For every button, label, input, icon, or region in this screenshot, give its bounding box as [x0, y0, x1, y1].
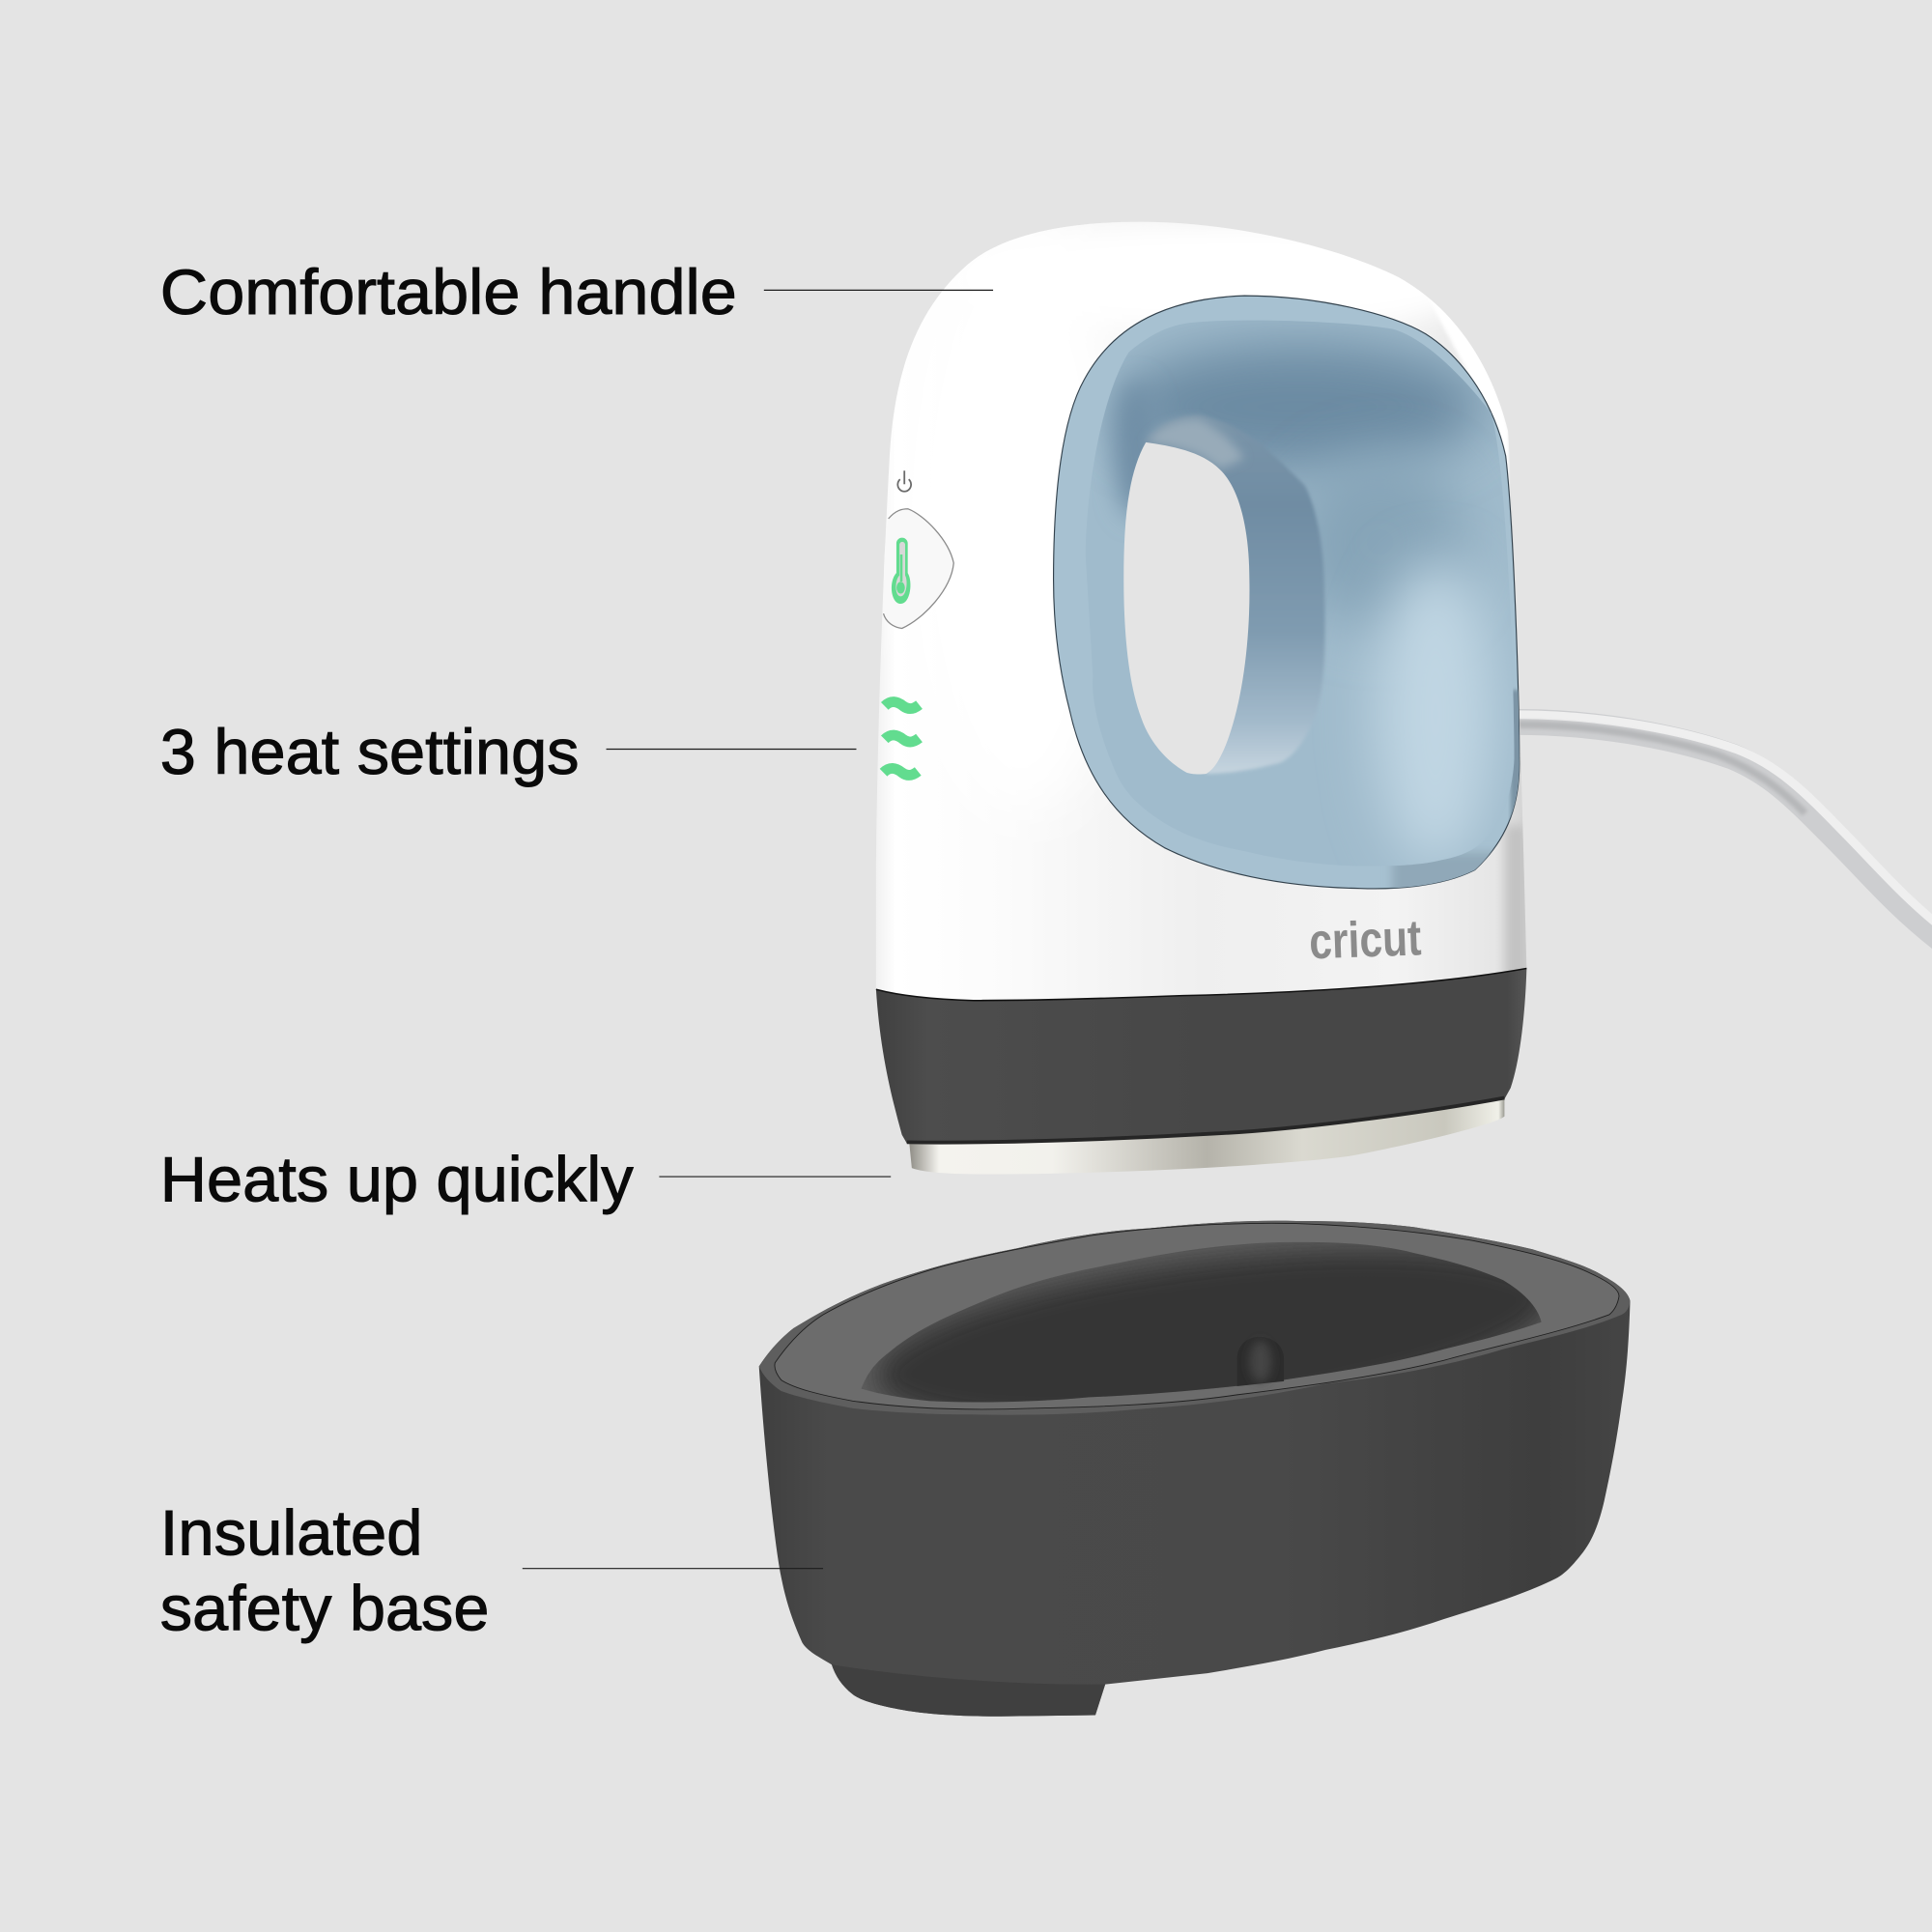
power cord	[1518, 715, 1932, 939]
base outer wall	[759, 1221, 1631, 1717]
dark lower band	[876, 969, 1526, 1144]
heading: insulated safety base: Insulated	[160, 1498, 422, 1570]
heading: heats up quickly: Heats up quickly	[160, 1145, 634, 1216]
base inner well	[850, 1220, 1559, 1454]
seam line	[876, 969, 1526, 1001]
handle recess	[1092, 321, 1515, 866]
handle rim right shade	[1392, 690, 1528, 902]
temperature button	[884, 509, 953, 629]
leader line: insulated safety base	[523, 1568, 823, 1570]
leader line: heats up quickly	[659, 1176, 891, 1178]
heading: insulated safety base: safety base	[160, 1574, 489, 1645]
cricut logo: cricut	[1308, 910, 1422, 970]
iron	[876, 222, 1528, 1175]
rim edge	[759, 1221, 1631, 1415]
handle hole	[1123, 442, 1249, 775]
locating peg	[1237, 1337, 1284, 1386]
power icon	[897, 470, 911, 492]
handle outer	[1054, 296, 1520, 889]
leader line: 3 heat settings	[607, 749, 856, 751]
body shading	[912, 222, 1526, 985]
metal soleplate	[909, 1099, 1504, 1175]
heading: insulated safety base	[160, 1498, 489, 1644]
handle tunnel wall	[1146, 415, 1325, 774]
tunnel highlight	[1146, 419, 1244, 469]
iron body	[876, 222, 1526, 1001]
base foot	[832, 1664, 1105, 1717]
heading: comfortable handle: Comfortable handle	[160, 257, 737, 328]
rim top surface	[775, 1223, 1619, 1409]
thermometer icon	[892, 538, 910, 604]
heat setting waves	[884, 702, 920, 775]
leader line: comfortable handle	[764, 289, 993, 291]
safety base	[759, 1220, 1631, 1717]
soleplate shadow line	[907, 1097, 1504, 1143]
heading: 3 heat settings: 3 heat settings	[160, 717, 579, 788]
